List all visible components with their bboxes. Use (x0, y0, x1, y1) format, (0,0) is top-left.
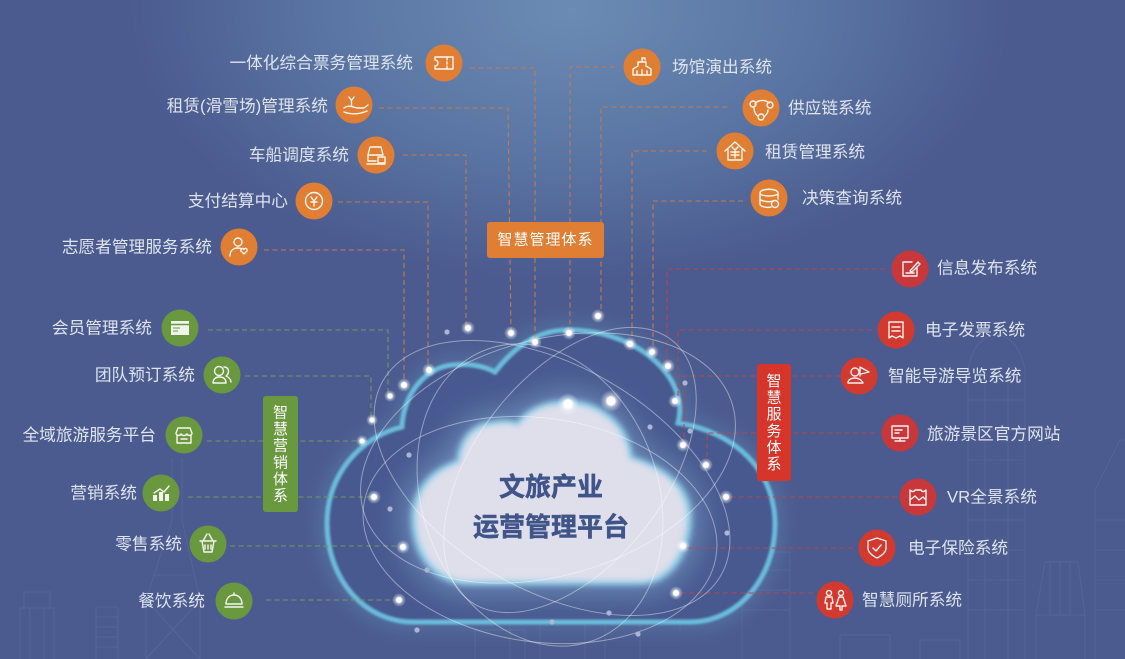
item: 车船调度系统: 车船调度系统 (249, 146, 349, 164)
tag: 智慧服务体系: 系 (766, 456, 782, 472)
tag: 智慧服务体系: 服 (766, 406, 782, 422)
item: 供应链系统: 供应链系统 (788, 98, 871, 118)
grey orbit nodes (387, 329, 730, 637)
tag: 智慧营销体系: 慧 (273, 420, 288, 438)
item: 零售系统: 零售系统 (115, 534, 182, 554)
item: 租赁管理系统 (716, 132, 865, 170)
orbit lines (327, 281, 777, 659)
glowing nodes (356, 309, 733, 607)
item: 旅游景区官方网站: 旅游景区官方网站 (927, 424, 1061, 444)
tag: 智慧服务体系: 务 (766, 422, 782, 440)
tag: 智慧营销体系: 智 (273, 403, 288, 421)
item: 电子发票系统: 电子发票系统 (925, 320, 1025, 340)
item: 租赁(滑雪场)管理系统 (167, 86, 372, 124)
tag: 智慧营销体系 (263, 396, 298, 512)
title: platform name: 文旅产业 (499, 472, 603, 502)
item: 会员管理系统: 会员管理系统 (52, 318, 152, 338)
item: 智慧厕所系统 (816, 582, 962, 618)
item: 电子保险系统: 电子保险系统 (908, 538, 1008, 558)
title: platform name: 运营管理平台 (473, 512, 629, 542)
item: 营销系统: 营销系统 (70, 484, 137, 502)
item: 支付结算中心 (188, 182, 332, 220)
item: 餐饮系统: 餐饮系统 (138, 592, 205, 610)
skyline (20, 335, 1125, 659)
item: 电子保险系统 (858, 530, 1008, 566)
outer cloud glow (327, 330, 775, 622)
item: VR全景系统: VR全景系统 (947, 488, 1037, 506)
item: 决策查询系统: 决策查询系统 (802, 188, 902, 208)
item: 旅游景区官方网站 (882, 414, 1061, 452)
tag: 智慧服务体系: 智 (766, 372, 782, 390)
item: 零售系统 (115, 526, 226, 562)
tag: 智慧服务体系: 慧 (766, 389, 782, 406)
item: 志愿者管理服务系统 (62, 228, 258, 266)
item: 智能导游导览系统: 智能导游导览系统 (888, 366, 1022, 386)
item: 信息发布系统: 信息发布系统 (937, 258, 1037, 278)
item: 一体化综合票务管理系统 (229, 44, 462, 82)
tag: 智慧营销体系: 营 (273, 437, 288, 454)
item: 团队预订系统: 团队预订系统 (95, 366, 195, 384)
item: VR全景系统 (900, 478, 1037, 516)
item: 电子发票系统 (878, 312, 1025, 348)
item: 租赁(滑雪场)管理系统: 租赁(滑雪场)管理系统 (167, 96, 328, 116)
item: 场馆演出系统: 场馆演出系统 (672, 58, 772, 76)
tag: 智慧服务体系: 体 (766, 439, 782, 456)
title: platform name (473, 472, 629, 542)
item: 营销系统 (70, 474, 180, 512)
item: 支付结算中心: 支付结算中心 (188, 192, 288, 210)
item: 一体化综合票务管理系统: 一体化综合票务管理系统 (229, 54, 413, 72)
tag: 智慧管理体系 (487, 222, 604, 258)
item: 决策查询系统 (750, 180, 902, 216)
item: 会员管理系统 (52, 310, 198, 346)
tag: 智慧营销体系: 系 (273, 487, 288, 504)
item: 团队预订系统 (95, 356, 240, 394)
item: 供应链系统 (742, 90, 871, 126)
item: 车船调度系统 (249, 136, 394, 174)
item: 全域旅游服务平台 (22, 416, 202, 454)
item: 志愿者管理服务系统: 志愿者管理服务系统 (62, 238, 212, 256)
item: 租赁管理系统: 租赁管理系统 (765, 142, 865, 162)
item: 场馆演出系统 (624, 48, 772, 86)
tag: 智慧营销体系: 体 (273, 470, 288, 488)
tag: 智慧管理体系: 智慧管理体系 (497, 230, 594, 248)
item: 全域旅游服务平台: 全域旅游服务平台 (22, 426, 156, 444)
item: 餐饮系统 (138, 582, 252, 620)
tag: 智慧营销体系: 销 (273, 454, 288, 471)
item: 信息发布系统 (892, 250, 1037, 288)
inner cloud halo (413, 402, 690, 583)
dashed connectors (188, 67, 897, 600)
tag: 智慧服务体系 (757, 364, 791, 481)
item: 智能导游导览系统 (840, 358, 1022, 394)
item: 智慧厕所系统: 智慧厕所系统 (862, 590, 962, 610)
inner cloud (413, 402, 690, 583)
